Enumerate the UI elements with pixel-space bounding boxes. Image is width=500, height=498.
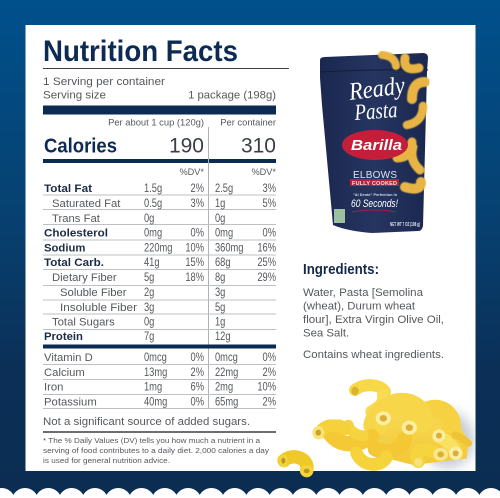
ingredients block: [303, 262, 444, 361]
vitamins and minerals: 22mg: [215, 366, 238, 379]
table rows: 1.5g: [144, 182, 162, 195]
ingredients list: [303, 287, 444, 340]
table rows: 3g: [215, 286, 225, 299]
table rows: Saturated Fat: [52, 198, 121, 210]
table rows: 2g: [144, 286, 154, 299]
table rows: Cholesterol: [44, 228, 108, 240]
vitamins and minerals: 65mg: [215, 396, 238, 409]
vitamins and minerals: [43, 351, 276, 409]
vitamins and minerals: Potassium: [44, 396, 97, 408]
column headers: [108, 116, 276, 128]
vitamins and minerals: 0mcg: [144, 351, 167, 364]
servings text: 1 Serving per container: [43, 76, 165, 88]
vitamins and minerals: Vitamin D: [44, 352, 93, 364]
main heap: [330, 385, 468, 467]
allergen note: Contains wheat ingredients.: [303, 349, 444, 361]
table rows: Dietary Fiber: [52, 272, 117, 284]
vitamins and minerals: 2%: [263, 366, 276, 379]
servings text: Serving size: [43, 90, 106, 102]
table rows: 68g: [215, 256, 231, 269]
table rows: Sodium: [44, 242, 85, 254]
servings text: 1 package (198g): [188, 90, 276, 102]
table rows: 29%: [257, 271, 276, 284]
pouch labels: FULLY COOKED: [352, 181, 397, 187]
table rows: Trans Fat: [52, 213, 101, 225]
vitamins and minerals: 0%: [263, 351, 276, 364]
title: Nutrition Facts: [43, 35, 238, 68]
table rows: Total Fat: [44, 183, 92, 195]
pouch labels: [334, 170, 420, 228]
ingredients list: Sea Salt.: [303, 328, 349, 340]
table rows: 0mg: [144, 227, 162, 240]
table rows: 16%: [257, 242, 276, 255]
Barilla logo: Barilla: [351, 137, 402, 154]
table rows: 25%: [257, 256, 276, 269]
vitamins and minerals: 13mg: [144, 366, 167, 379]
table rows: 0.5g: [144, 197, 162, 210]
table rows: 0g: [144, 316, 154, 329]
%DV header: %DV*: [179, 167, 204, 177]
table rows: 0mg: [215, 227, 233, 240]
pouch title: Pasta: [353, 97, 398, 125]
table rows: 3%: [191, 197, 204, 210]
calories row: 190: [169, 134, 204, 158]
column headers: Per about 1 cup (120g): [108, 116, 204, 128]
table rows: 41g: [144, 256, 160, 269]
table rows: 0g: [144, 212, 154, 225]
vitamins and minerals: 0%: [191, 351, 204, 364]
table rows: 0g: [215, 212, 225, 225]
table rows: Total Sugars: [52, 316, 115, 328]
table rows: 0%: [191, 227, 204, 240]
table rows: Insoluble Fiber: [60, 302, 137, 314]
table rows: 220mg: [144, 242, 173, 255]
table rows: Total Carb.: [44, 257, 104, 269]
pouch labels: "Al Dente" Perfection In: [353, 193, 397, 197]
table rows: Soluble Fiber: [60, 287, 127, 299]
vitamins and minerals: 0%: [191, 396, 204, 409]
pouch labels: ELBOWS: [353, 170, 397, 181]
vitamins and minerals: 1mg: [144, 381, 162, 394]
pouch title: [347, 72, 407, 125]
table rows: 15%: [185, 256, 204, 269]
vitamins and minerals: Calcium: [44, 367, 85, 379]
footnote: is used for general nutrition advice.: [43, 456, 170, 465]
vitamins and minerals: 2mg: [215, 381, 233, 394]
ingredients heading: Ingredients:: [303, 262, 379, 278]
pasta on pouch: [382, 55, 425, 189]
table rows: 3g: [144, 301, 154, 314]
vitamins and minerals: 2%: [191, 366, 204, 379]
table rows: Protein: [44, 331, 83, 343]
pouch title: Ready: [347, 72, 407, 106]
table rows: 5g: [215, 301, 225, 314]
calories row: Calories: [44, 136, 117, 158]
vitamins and minerals: 40mg: [144, 396, 167, 409]
vitamins and minerals: 0mcg: [215, 351, 238, 364]
vitamins and minerals: Iron: [44, 382, 63, 394]
vitamins and minerals: 2%: [263, 396, 276, 409]
table rows: 1g: [215, 197, 225, 210]
table rows: 18%: [185, 271, 204, 284]
table rows: 7g: [144, 330, 154, 343]
Barilla logo: [342, 130, 408, 160]
shadow: [422, 412, 474, 468]
calories row: [44, 134, 276, 158]
table rows: 12g: [215, 330, 231, 343]
table rows: 2.5g: [215, 182, 233, 195]
vitamins and minerals: 6%: [191, 381, 204, 394]
pouch: [320, 53, 428, 233]
%DV header: [179, 167, 276, 177]
product package: [320, 53, 428, 233]
%DV header: %DV*: [251, 167, 276, 177]
footnote: * The % Daily Values (DV) tells you how much a nutrient in a: [43, 436, 261, 445]
calories row: 310: [241, 134, 276, 158]
footnote: serving of food contributes to a daily diet. 2,000 calories a day: [43, 446, 269, 455]
added sugars note: Not a significant source of added sugars.: [43, 416, 250, 428]
ingredients list: Water, Pasta [Semolina: [303, 287, 424, 299]
footnote: [43, 436, 269, 465]
pouch labels: NET WT 7 OZ (198 g): [390, 222, 420, 228]
table rows: 2%: [191, 182, 204, 195]
pouch labels: 60 Seconds!: [351, 198, 398, 210]
ingredients list: (wheat), Durum wheat: [303, 300, 416, 312]
panel: nutrition facts label: [43, 35, 289, 465]
vitamins and minerals: 10%: [257, 381, 276, 394]
scalloped bottom edge: [0, 488, 500, 498]
servings text: [43, 76, 276, 102]
table rows: [43, 182, 276, 343]
pasta pile: [279, 385, 474, 477]
table rows: 0%: [263, 227, 276, 240]
table rows: 3%: [263, 182, 276, 195]
table rows: 360mg: [215, 242, 244, 255]
table rows: 10%: [185, 242, 204, 255]
table rows: 8g: [215, 271, 225, 284]
table rows: 5g: [144, 271, 154, 284]
ingredients list: flour], Extra Virgin Olive Oil,: [303, 314, 444, 326]
table rows: 5%: [263, 197, 276, 210]
table rows: 1g: [215, 316, 225, 329]
left and lone elbows: [279, 425, 345, 477]
column headers: Per container: [220, 116, 276, 128]
